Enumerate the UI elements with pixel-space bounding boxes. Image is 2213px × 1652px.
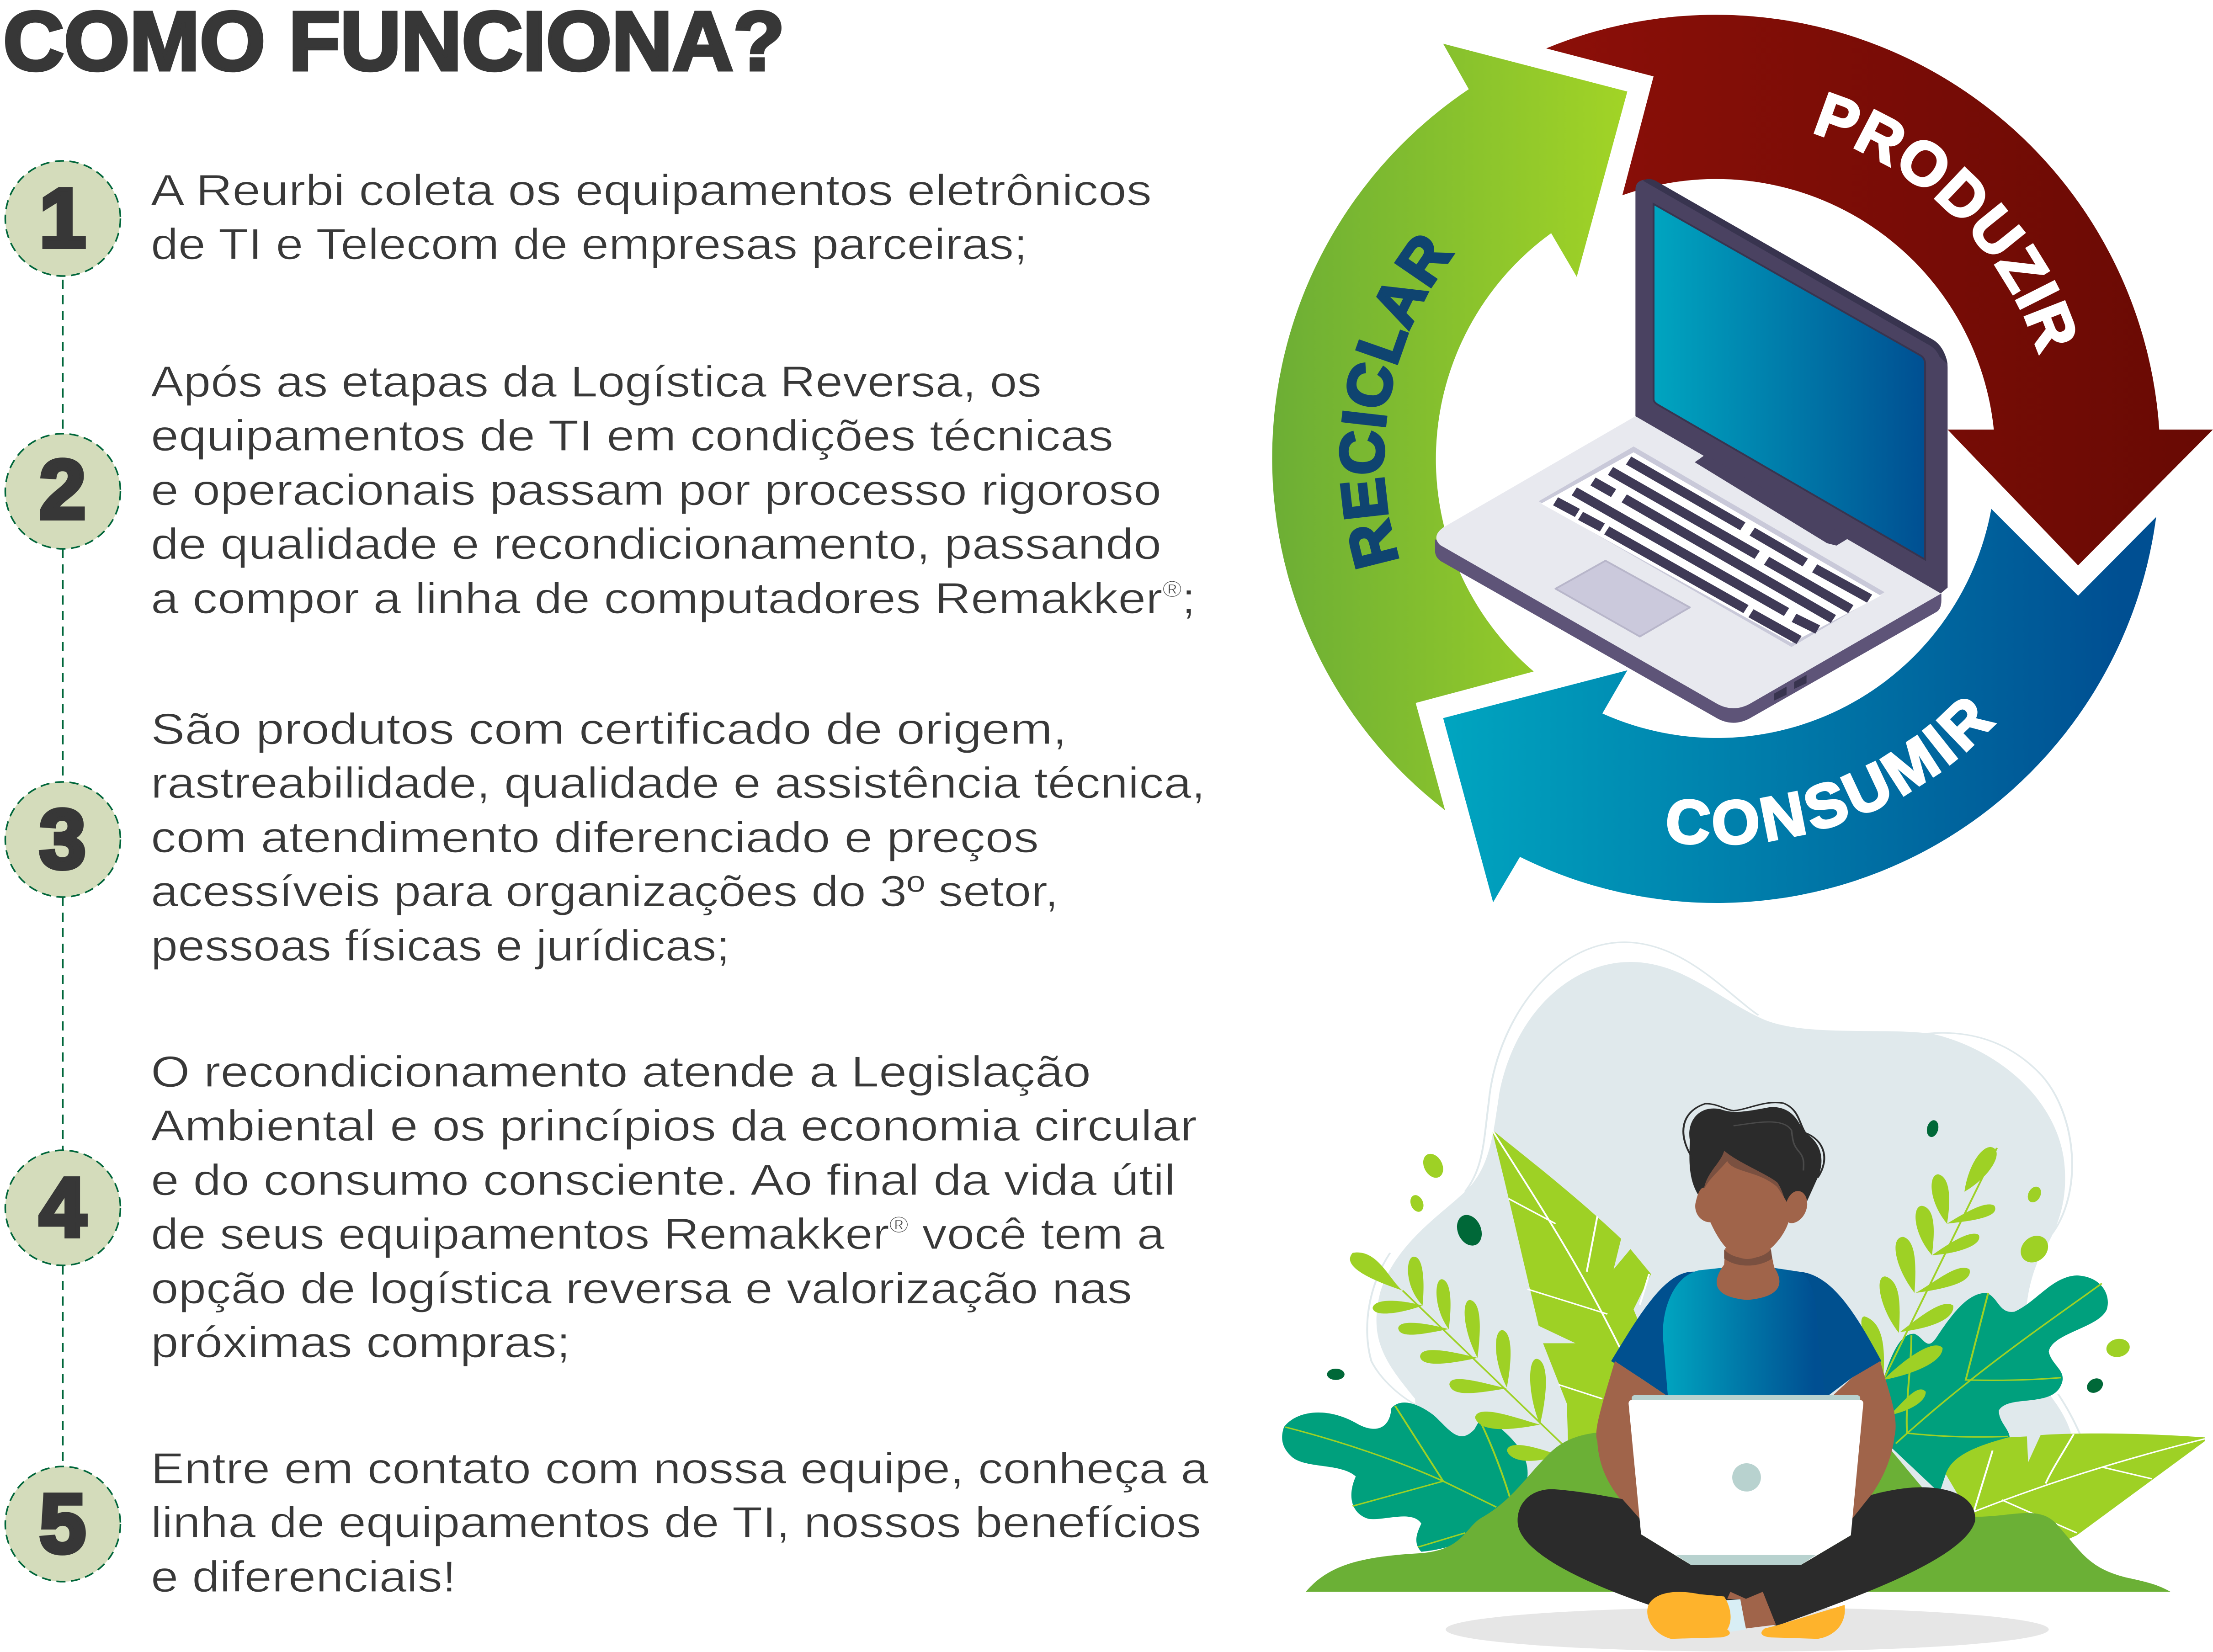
lime leaf right bbox=[1946, 1434, 2205, 1549]
badge 4: 4 bbox=[39, 1160, 86, 1254]
step 3 bbox=[5, 705, 1205, 970]
badge 3 bbox=[5, 782, 121, 897]
person bbox=[1517, 1103, 1975, 1639]
step 4 bbox=[5, 1047, 1197, 1367]
step 1 text: de TI e Telecom de empresas parceiras; bbox=[151, 220, 1027, 269]
ground shadow bbox=[1446, 1607, 2049, 1652]
teal leaf left bbox=[1282, 1402, 1527, 1552]
sock bbox=[1725, 1599, 1746, 1632]
step 5 bbox=[5, 1444, 1209, 1601]
timeline connector 1 to 2 bbox=[62, 280, 64, 433]
arrow: consumir bbox=[1443, 509, 2156, 903]
step 5 text: e diferenciais! bbox=[151, 1552, 456, 1601]
hair bbox=[1683, 1103, 1824, 1203]
step 2 bbox=[5, 357, 1196, 623]
step 2 text: ; bbox=[1182, 574, 1196, 623]
step 2 text: ® bbox=[1163, 576, 1182, 602]
badge 4 bbox=[5, 1150, 121, 1265]
step 2 text bbox=[151, 357, 1196, 623]
arrow: reciclar bbox=[1272, 44, 1628, 810]
badge 5: 5 bbox=[39, 1477, 86, 1570]
lime frond left bbox=[1350, 1253, 1584, 1465]
lime frond right bbox=[1862, 1147, 1997, 1415]
step 3 text: rastreabilidade, qualidade e assistência técnica, bbox=[151, 759, 1205, 807]
badge 1: 1 bbox=[39, 171, 86, 265]
step 2 text: a compor a linha de computadores Remakker bbox=[151, 574, 1038, 623]
step 4 text: O recondicionamento atende a Legislação bbox=[151, 1047, 1091, 1096]
label: produzir: PRODUZIR bbox=[1807, 79, 2092, 361]
step 5 text: linha de equipamentos de TI, nossos benefícios bbox=[151, 1498, 1201, 1547]
step 3 text: acessíveis para organizações do 3º setor, bbox=[151, 867, 1059, 916]
illustration: person with laptop among plants bbox=[1282, 942, 2205, 1652]
step 2 text: Após as etapas da Logística Reversa, os bbox=[151, 357, 1042, 406]
step 2 text: e operacionais passam por processo rigoroso bbox=[151, 466, 1161, 515]
badge 5 bbox=[5, 1466, 121, 1582]
step 3 text: com atendimento diferenciado e preços bbox=[151, 813, 1039, 862]
face bbox=[1695, 1161, 1807, 1259]
ankle bbox=[1727, 1592, 1776, 1629]
step 4 text: Ambiental e os princípios da economia circular bbox=[151, 1101, 1197, 1150]
step 1 bbox=[5, 161, 1152, 276]
timeline connector 3 to 4 bbox=[62, 897, 64, 1150]
hairline shadow bbox=[1703, 1151, 1787, 1203]
arrow: produzir bbox=[1546, 15, 2213, 565]
neck bbox=[1717, 1248, 1779, 1300]
badge 1 bbox=[5, 161, 121, 276]
floating leaf dots bbox=[1327, 1120, 2134, 1395]
step 4 text: opção de logística reversa e valorização nas bbox=[151, 1264, 1132, 1313]
step 1 text bbox=[151, 166, 1152, 269]
step 2 text: equipamentos de TI em condições técnicas bbox=[151, 411, 1113, 460]
legs bbox=[1517, 1487, 1975, 1625]
step 4 text: e do consumo consciente. Ao final da vida útil bbox=[151, 1156, 1176, 1205]
step 5 text: Entre em contato com nossa equipe, conheça a bbox=[151, 1444, 1209, 1493]
icon: laptop bbox=[1435, 179, 1947, 723]
label: reciclar: RECICLAR bbox=[1327, 221, 1465, 575]
step 5 text bbox=[151, 1444, 1209, 1601]
right shoe bbox=[1761, 1605, 1845, 1639]
timeline connector 4 to 5 bbox=[62, 1265, 64, 1466]
badge 2: 2 bbox=[39, 442, 86, 536]
label: consumir: CONSUMIR bbox=[1664, 680, 2008, 858]
teal leaf right bbox=[1883, 1275, 2108, 1493]
background blob bbox=[1377, 962, 2077, 1526]
timeline connector 2 to 3 bbox=[62, 549, 64, 782]
step 4 text: ® bbox=[889, 1212, 909, 1238]
step 3 text bbox=[151, 705, 1205, 970]
step 1 text: A Reurbi coleta os equipamentos eletrônicos bbox=[151, 166, 1152, 215]
circular arrows diagram bbox=[1272, 15, 2213, 903]
badge 2 bbox=[5, 434, 121, 549]
step 3 text: São produtos com certificado de origem, bbox=[151, 705, 1067, 754]
step 4 text: você tem a bbox=[908, 1210, 1165, 1259]
step 3 text: pessoas físicas e jurídicas; bbox=[151, 921, 730, 970]
left shoe bbox=[1647, 1592, 1731, 1639]
bush bbox=[1306, 1431, 2170, 1592]
step 4 text bbox=[151, 1047, 1197, 1367]
arms bbox=[1596, 1361, 1896, 1524]
step 4 text: de seus equipamentos Remakker bbox=[151, 1210, 804, 1259]
shirt bbox=[1611, 1268, 1882, 1397]
lime large leaf bbox=[1492, 1130, 1684, 1441]
badge 3: 3 bbox=[39, 792, 86, 886]
blob outline strokes bbox=[1367, 942, 2080, 1434]
person's laptop bbox=[1628, 1395, 1863, 1565]
step 4 text: próximas compras; bbox=[151, 1318, 570, 1367]
neck shadow bbox=[1724, 1249, 1772, 1265]
step 2 text: de qualidade e recondicionamento, passando bbox=[151, 520, 1161, 568]
